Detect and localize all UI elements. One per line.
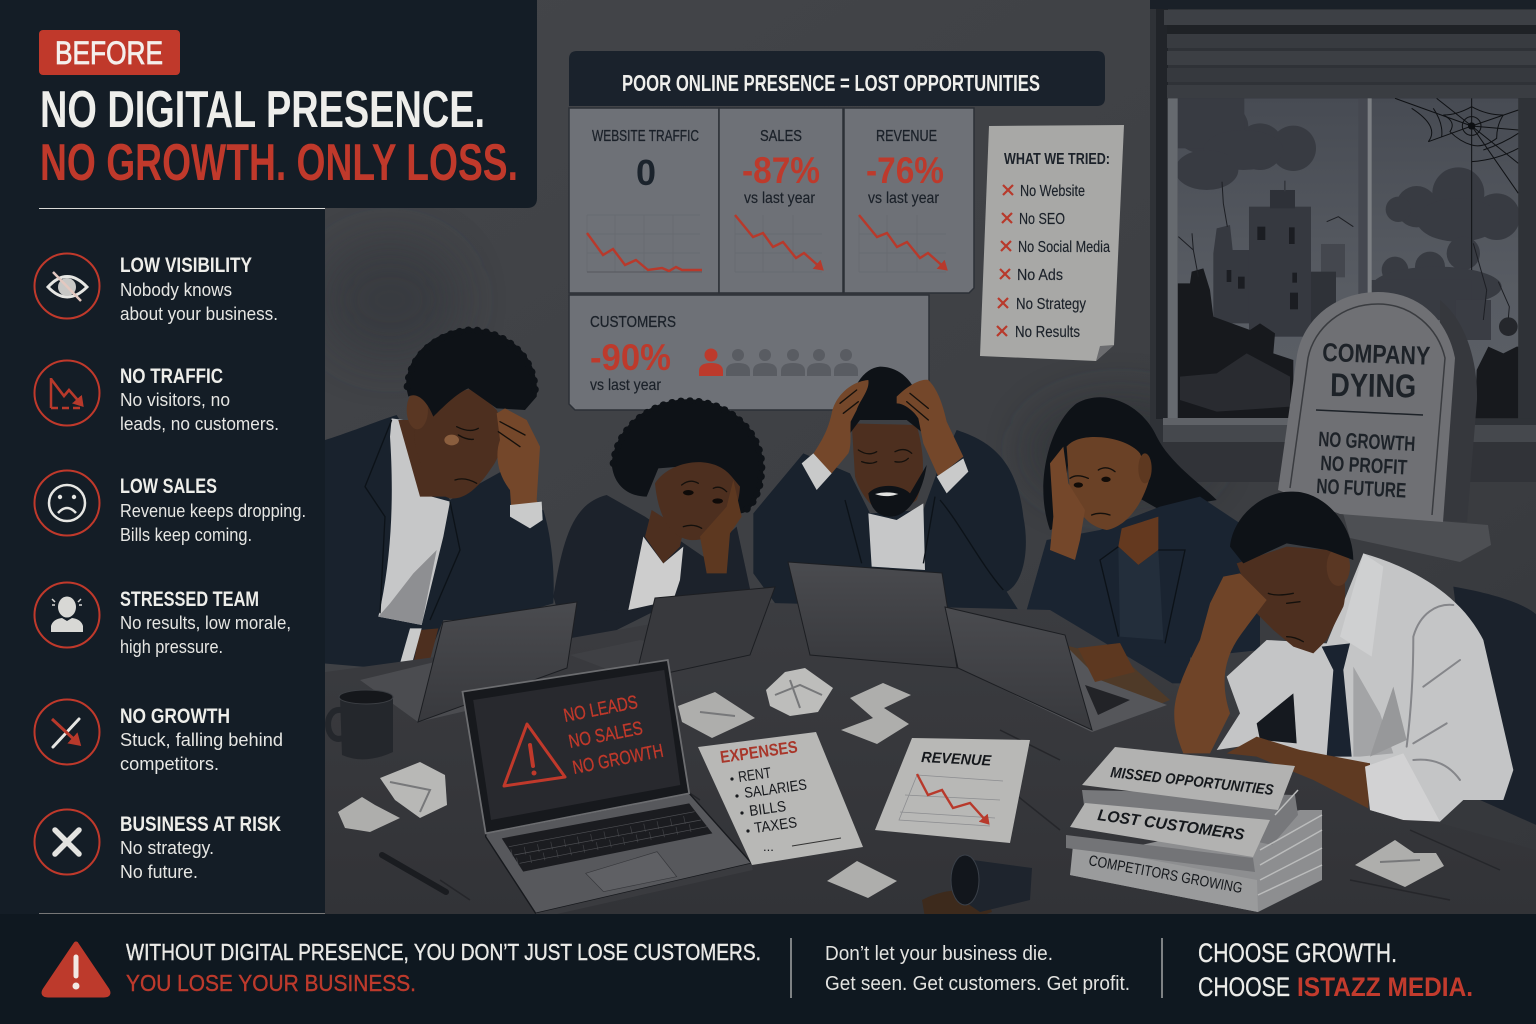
person 1: man holding forehead <box>323 328 554 670</box>
warning message: YOU LOSE YOUR BUSINESS. <box>126 970 416 996</box>
gravestone text <box>1316 337 1431 503</box>
before badge: BEFORE <box>55 35 163 71</box>
laptop warning triangle <box>504 724 565 786</box>
note: what we tried <box>980 125 1124 361</box>
panel: sales <box>719 108 843 293</box>
panel: sales: vs last year <box>744 190 816 207</box>
window frames <box>1168 98 1178 418</box>
headline: NO GROWTH. ONLY LOSS. <box>40 134 518 192</box>
paper stacks: COMPETITORS GROWING <box>1087 852 1244 897</box>
gravestone <box>1278 292 1491 562</box>
item: business at risk: No strategy. <box>120 837 214 858</box>
headline: NO DIGITAL PRESENCE. <box>40 81 485 139</box>
item: low sales: Bills keep coming. <box>120 524 252 545</box>
advice message: Don’t let your business die. <box>825 943 1053 965</box>
spider web <box>1395 98 1518 270</box>
open laptops <box>360 562 1167 732</box>
item: stressed team: No results, low morale, <box>120 612 291 633</box>
item: low visibility: LOW VISIBILITY <box>120 254 252 277</box>
laptop 4 <box>945 607 1167 732</box>
advice message <box>825 943 1130 995</box>
gravestone text: NO FUTURE <box>1316 475 1407 503</box>
gravestone text: COMPANY <box>1322 337 1431 371</box>
city buildings <box>1213 181 1491 340</box>
item: business at risk <box>34 810 281 882</box>
customer icons <box>699 348 858 376</box>
warning message <box>126 939 761 996</box>
expenses paper: BILLS <box>748 798 787 820</box>
top labels <box>1082 747 1295 810</box>
window sill <box>1163 418 1536 482</box>
stack pages <box>1070 810 1322 912</box>
expenses paper: SALARIES <box>743 776 808 802</box>
person 3: man clutching head <box>753 367 1026 610</box>
icon: warning triangle <box>44 944 108 995</box>
panel: sales: SALES <box>760 128 802 145</box>
panel: website traffic: 0 <box>636 152 656 193</box>
before badge <box>39 30 180 75</box>
gravestone text: NO PROFIT <box>1320 452 1408 480</box>
item: no growth: Stuck, falling behind <box>120 729 283 750</box>
item: stressed team: high pressure. <box>120 636 223 657</box>
revenue paper with falling chart: REVENUE <box>921 749 993 770</box>
laptop screen text: NO LEADS <box>562 692 640 727</box>
item: low visibility: Nobody knows <box>120 279 232 300</box>
panel: revenue: vs last year <box>868 190 940 207</box>
item: stressed team: STRESSED TEAM <box>120 588 259 611</box>
window with ruined city view <box>1150 0 1536 482</box>
item: business at risk: No future. <box>120 861 198 882</box>
gravestone text: DYING <box>1330 366 1417 404</box>
warning message: WITHOUT DIGITAL PRESENCE, YOU DON’T JUST LOSE CUSTOMERS. <box>126 939 761 965</box>
meeting table <box>325 603 1536 914</box>
item: stressed team <box>34 582 291 657</box>
panel: sales: -87% <box>742 150 820 191</box>
title panel <box>0 0 537 208</box>
dashboard header <box>569 51 1105 106</box>
rubble foreground <box>1178 268 1518 418</box>
call to action: CHOOSE GROWTH. <box>1198 938 1397 968</box>
note: what we tried: No Social Media <box>1018 239 1110 256</box>
item: low sales: LOW SALES <box>120 475 217 498</box>
item: no traffic: leads, no customers. <box>120 413 279 434</box>
item: low sales: Revenue keeps dropping. <box>120 500 306 521</box>
panel: problems sidebar <box>0 208 325 914</box>
note: what we tried: WHAT WE TRIED: <box>1004 151 1110 168</box>
coffee mug <box>328 690 393 759</box>
call to action: ISTAZZ MEDIA. <box>1297 972 1473 1002</box>
laptop 3 <box>788 562 957 668</box>
item: no growth: competitors. <box>120 753 219 774</box>
panel: customers: CUSTOMERS <box>590 314 676 331</box>
laptop screen text: NO GROWTH <box>571 741 665 779</box>
call to action: CHOOSE <box>1198 972 1290 1002</box>
expenses paper: EXPENSES <box>719 737 799 767</box>
window blinds <box>1164 10 1536 98</box>
expenses paper: RENT <box>737 765 772 786</box>
call to action <box>1198 938 1473 1002</box>
crumpled papers <box>338 668 1444 898</box>
panel: website traffic <box>569 108 719 293</box>
panel: revenue: REVENUE <box>876 128 937 145</box>
front laptop <box>462 660 753 918</box>
paper stacks: MISSED OPPORTUNITIES <box>1110 764 1274 799</box>
item: no traffic: No visitors, no <box>120 389 230 410</box>
laptop screen text <box>562 692 665 779</box>
note: what we tried: No Results <box>1015 324 1080 341</box>
note: what we tried: No SEO <box>1019 211 1065 228</box>
item: low visibility: about your business. <box>120 303 278 324</box>
item: no traffic: NO TRAFFIC <box>120 365 223 388</box>
laptop screen text: NO SALES <box>567 718 645 753</box>
expenses paper <box>698 732 863 865</box>
note: what we tried: No Strategy <box>1016 296 1086 313</box>
item: no growth <box>34 700 283 774</box>
person 4 hand on laptop <box>1078 643 1135 682</box>
note: what we tried: No Ads <box>1017 267 1063 284</box>
item: no traffic <box>34 360 279 434</box>
gravestone text: NO GROWTH <box>1318 428 1416 456</box>
person 4: woman with long dark hair <box>1027 397 1260 683</box>
item: business at risk: BUSINESS AT RISK <box>120 813 281 836</box>
storm clouds <box>1172 98 1520 320</box>
bare trees and cracks <box>1178 182 1509 320</box>
dashboard header: POOR ONLINE PRESENCE = LOST OPPORTUNITIES <box>622 70 1040 96</box>
spilled coffee cup <box>922 855 1032 920</box>
revenue paper with falling chart <box>875 738 1030 843</box>
laptop 1 <box>360 602 577 722</box>
person 5: man in white shirt and tie <box>1174 492 1536 827</box>
paper stacks <box>1066 747 1322 912</box>
panel: customers: -90% <box>590 337 671 378</box>
paper stacks: LOST CUSTOMERS <box>1096 807 1246 844</box>
expenses paper: ... <box>763 839 774 854</box>
panel: revenue: -76% <box>866 150 944 191</box>
panel: revenue <box>844 108 974 293</box>
bottom banner <box>0 914 1536 1024</box>
panel: website traffic: WEBSITE TRAFFIC <box>592 128 699 145</box>
item: low visibility <box>34 254 278 324</box>
pen <box>382 855 446 892</box>
advice message: Get seen. Get customers. Get profit. <box>825 973 1130 995</box>
laptop 2 <box>570 587 775 680</box>
expenses paper: TAXES <box>753 814 798 837</box>
panel: customers: vs last year <box>590 377 662 394</box>
note: what we tried: No Website <box>1020 183 1085 200</box>
panel: customers <box>569 295 929 410</box>
item: low sales <box>34 470 306 545</box>
item: no growth: NO GROWTH <box>120 705 230 728</box>
person 2: woman resting head on hand <box>553 399 763 653</box>
city scene through glass <box>1168 98 1536 418</box>
headline <box>40 81 518 192</box>
